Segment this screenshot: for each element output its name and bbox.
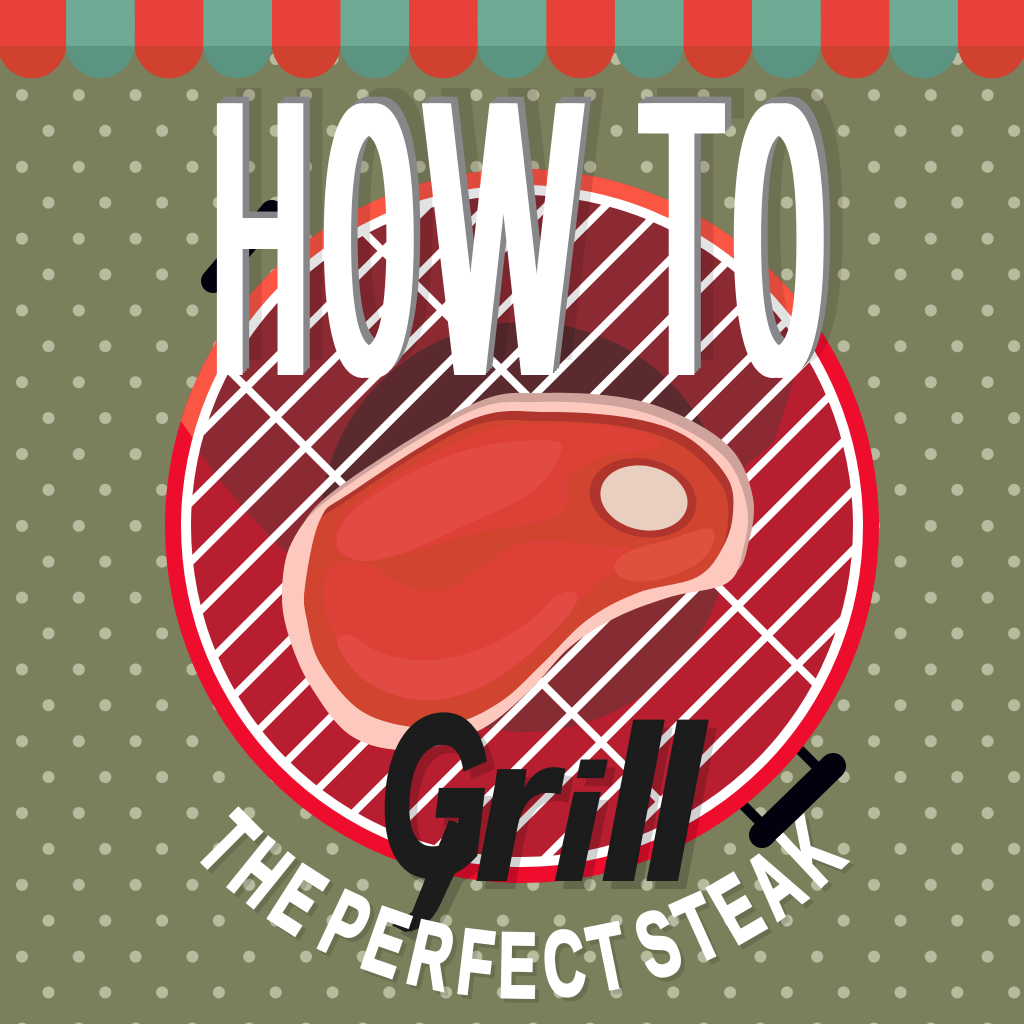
heading: Grill: G	[380, 670, 489, 921]
awning	[0, 0, 1024, 78]
subtitle: THE PERFECT STEAK: R	[399, 902, 462, 1011]
title letters: O	[322, 37, 415, 496]
title drop shadow: O	[341, 22, 434, 481]
title letters: O	[732, 37, 825, 496]
icon: grill right handle	[735, 745, 833, 835]
title drop shadow: O	[751, 22, 844, 481]
heading: Grill: i	[553, 731, 607, 915]
subtitle: THE PERFECT STEAK: S	[624, 890, 693, 999]
icon: grill left handle	[213, 212, 272, 281]
heading: Grill: l	[644, 682, 708, 927]
grill	[165, 169, 879, 883]
grill rim	[165, 169, 879, 883]
grill grate bars	[192, 202, 852, 856]
steak bone marrow	[582, 448, 704, 547]
subtitle: THE PERFECT STEAK: F	[452, 911, 499, 1016]
subtitle: THE PERFECT STEAK: K	[762, 801, 862, 904]
subtitle: THE PERFECT STEAK: H	[212, 820, 308, 926]
title drop shadow: T	[661, 2, 740, 444]
G descender swash	[392, 820, 476, 932]
title letters: T	[642, 17, 721, 459]
subtitle: THE PERFECT STEAK: T	[661, 875, 735, 983]
subtitle: THE PERFECT STEAK: E	[498, 915, 537, 1018]
title drop shadow: W	[447, 2, 598, 444]
steak fat	[282, 402, 748, 750]
title drop shadow: H	[232, 2, 326, 444]
heading: Grill	[380, 670, 708, 932]
title drop shadow	[232, 2, 844, 481]
subtitle: THE PERFECT STEAK: E	[351, 889, 421, 998]
steak	[280, 390, 760, 750]
subtitle: THE PERFECT STEAK: P	[306, 872, 384, 981]
heading: Grill: r	[474, 693, 565, 925]
steak fat edge shadow	[288, 393, 754, 741]
subtitle: THE PERFECT STEAK: A	[728, 831, 822, 938]
steak meat	[304, 411, 734, 727]
subtitle: THE PERFECT STEAK: E	[695, 856, 779, 963]
title: HOW TO	[213, 2, 844, 496]
subtitle: THE PERFECT STEAK: T	[178, 795, 275, 892]
heading: Grill: l	[600, 682, 664, 927]
title letters: H	[213, 17, 307, 459]
subtitle: THE PERFECT STEAK: C	[539, 912, 589, 1017]
title letters	[213, 17, 830, 496]
subtitle: THE PERFECT STEAK	[178, 795, 862, 1018]
grill interior with shadow	[191, 195, 853, 857]
subtitle: THE PERFECT STEAK: T	[581, 904, 635, 1011]
subtitle: THE PERFECT STEAK: E	[254, 847, 341, 953]
title letters: W	[428, 17, 579, 459]
